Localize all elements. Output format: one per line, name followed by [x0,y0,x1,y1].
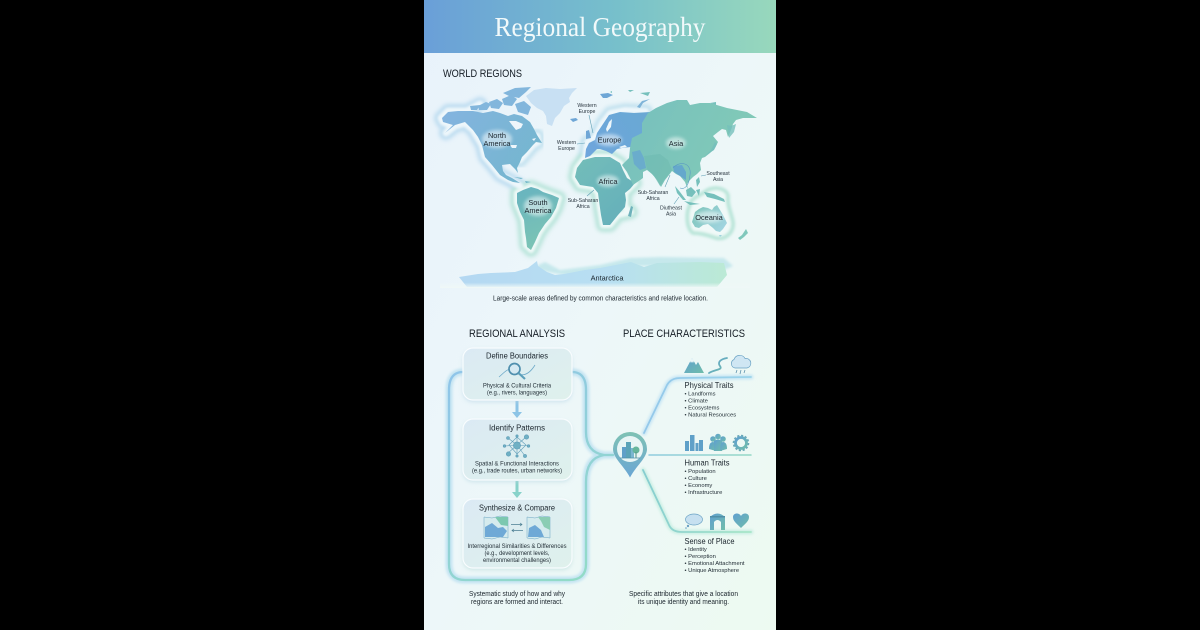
label: North America: North [488,131,506,140]
label: South America: America [524,206,552,215]
list: • Perception [684,554,716,560]
caption: world regions: Large-scale areas defined by common characteristics and relative location. [493,296,708,302]
icons: physical traits [684,355,751,374]
shape: africa [575,157,635,225]
label: North America: America [483,139,511,148]
shape: arctic islands [470,87,531,115]
list: • Landforms [684,392,716,398]
text: physical traits [684,380,736,418]
label: South America: South [528,198,548,207]
halo rings around coasts [441,104,733,250]
box description: Spatial & Functional Interactions [475,462,559,468]
shape: madagascar [628,206,633,217]
flow loop connector [449,372,613,580]
icon: location pin [613,432,647,478]
label: Western Europe north: Europe [579,109,595,115]
label: Sub-Saharan Africa east: Africa [646,196,660,202]
caption: place characteristics [629,591,738,606]
list: • Ecosystems [684,406,719,412]
icon: left map [484,516,508,539]
list: • Emotional Attachment [684,561,745,567]
list: • Identity [684,547,707,553]
panel: define boundaries [463,348,572,402]
icon: thought bubble [685,514,702,529]
box description: Physical & Cultural Criteria [483,384,552,390]
list: • Natural Resources [684,412,736,418]
icon: rain cloud [731,355,751,374]
shape: south america [517,187,559,250]
icons: human traits [685,434,748,451]
title: Regional Geography [494,12,706,42]
icon: city [685,435,703,451]
label: Western Europe north: Western [577,103,597,109]
icon: right map [527,516,550,539]
box description: (e.g., trade routes, urban networks) [472,468,562,474]
label: Asia: Asia [669,139,684,148]
label: Antarctica: Antarctica [591,274,624,282]
caption: regional analysis: Systematic study of how and why [469,591,565,598]
shape: greenland [526,88,577,126]
caption: regional analysis: regions are formed and interact. [471,599,563,606]
icon: compare arrows [511,523,523,532]
icon: river [709,358,727,373]
shape: middle east tint [632,150,646,170]
text: human traits: Human Traits [684,458,730,468]
icons: sense of place [685,513,749,530]
label: Europe: Europe [598,136,621,144]
icon: magnifier on boundary [499,364,535,379]
label: Africa: Africa [599,177,618,186]
caption: place characteristics: Specific attributes that give a location [629,591,738,598]
box description [468,544,566,564]
label: Western Europe west: Europe [558,146,575,152]
label: Diutheast Asia: Diutheast [660,206,683,212]
list: • Economy [684,483,712,489]
text: physical traits: Physical Traits [684,380,734,390]
label glows [482,130,723,223]
shape: novaya zemlya [637,99,650,108]
box description [472,462,562,474]
shape: north america [442,111,542,183]
shape: southeast asia tint [673,165,686,180]
label: Western Europe west: Western [557,140,576,146]
shape: europe [585,112,650,158]
box title: Identify Patterns [489,424,545,432]
icon: network [503,435,530,458]
list: • Infrastructure [684,490,722,496]
box description [483,384,552,396]
shape: south asia tint [644,154,672,186]
branch connectors [643,377,751,532]
shape: asia [622,100,757,190]
list: • Culture [684,476,707,482]
arrow: boundaries to patterns [512,401,522,418]
label: Sub-Saharan Africa east: Sub-Saharan [638,190,668,196]
text: sense of place: Sense of Place [684,536,735,546]
list: • Population [684,469,716,475]
box description: (e.g., rivers, languages) [487,390,547,396]
shape: british isles and iceland [570,93,613,139]
panel: page [424,0,776,630]
text: sense of place [684,536,745,574]
shape: new zealand [738,229,748,240]
list: • Climate [684,398,708,404]
box title: Synthesize & Compare [479,504,556,512]
shape: antarctica [440,257,750,288]
label: Diutheast Asia: Asia [666,212,676,218]
box description: Interregional Similarities & Differences [468,544,566,550]
box title: Define Boundaries [486,352,548,360]
label: Southeast Asia: Southeast [706,171,730,177]
label: Sub-Saharan Africa west: Africa [576,204,590,210]
text: human traits [684,458,730,496]
heading: world regions: WORLD REGIONS [443,68,522,80]
shape: australia [692,205,727,232]
label: Oceania: Oceania [695,213,724,222]
shape: asian islands [610,90,736,205]
panel: world map [440,87,757,288]
icon: mountains [684,358,704,373]
icon: people [709,434,727,451]
panel: identify patterns [463,419,572,482]
icon: arch [710,514,725,530]
panel: synthesize and compare [463,499,572,570]
header banner [424,0,776,53]
label: Sub-Saharan Africa west: Sub-Saharan [568,198,598,204]
box description: environmental challenges) [483,558,551,564]
label: Southeast Asia: Asia [713,177,723,183]
heading: regional analysis: REGIONAL ANALYSIS [469,328,565,340]
arrow: patterns to synthesize [512,481,522,498]
callout lines [577,115,706,204]
shape: baltic and black sea [606,119,627,148]
shape: hudson bay and lakes [509,121,536,148]
heading: place characteristics: PLACE CHARACTERISTICS [623,328,745,340]
icon: heart [733,513,749,528]
shape: caribbean islands [514,177,531,183]
box description: (e.g., development levels, [484,551,550,557]
caption: regional analysis [469,591,565,606]
caption: place characteristics: its unique identity and meaning. [638,599,729,606]
list: • Unique Atmosphere [684,568,739,574]
icon: gear [734,436,748,450]
